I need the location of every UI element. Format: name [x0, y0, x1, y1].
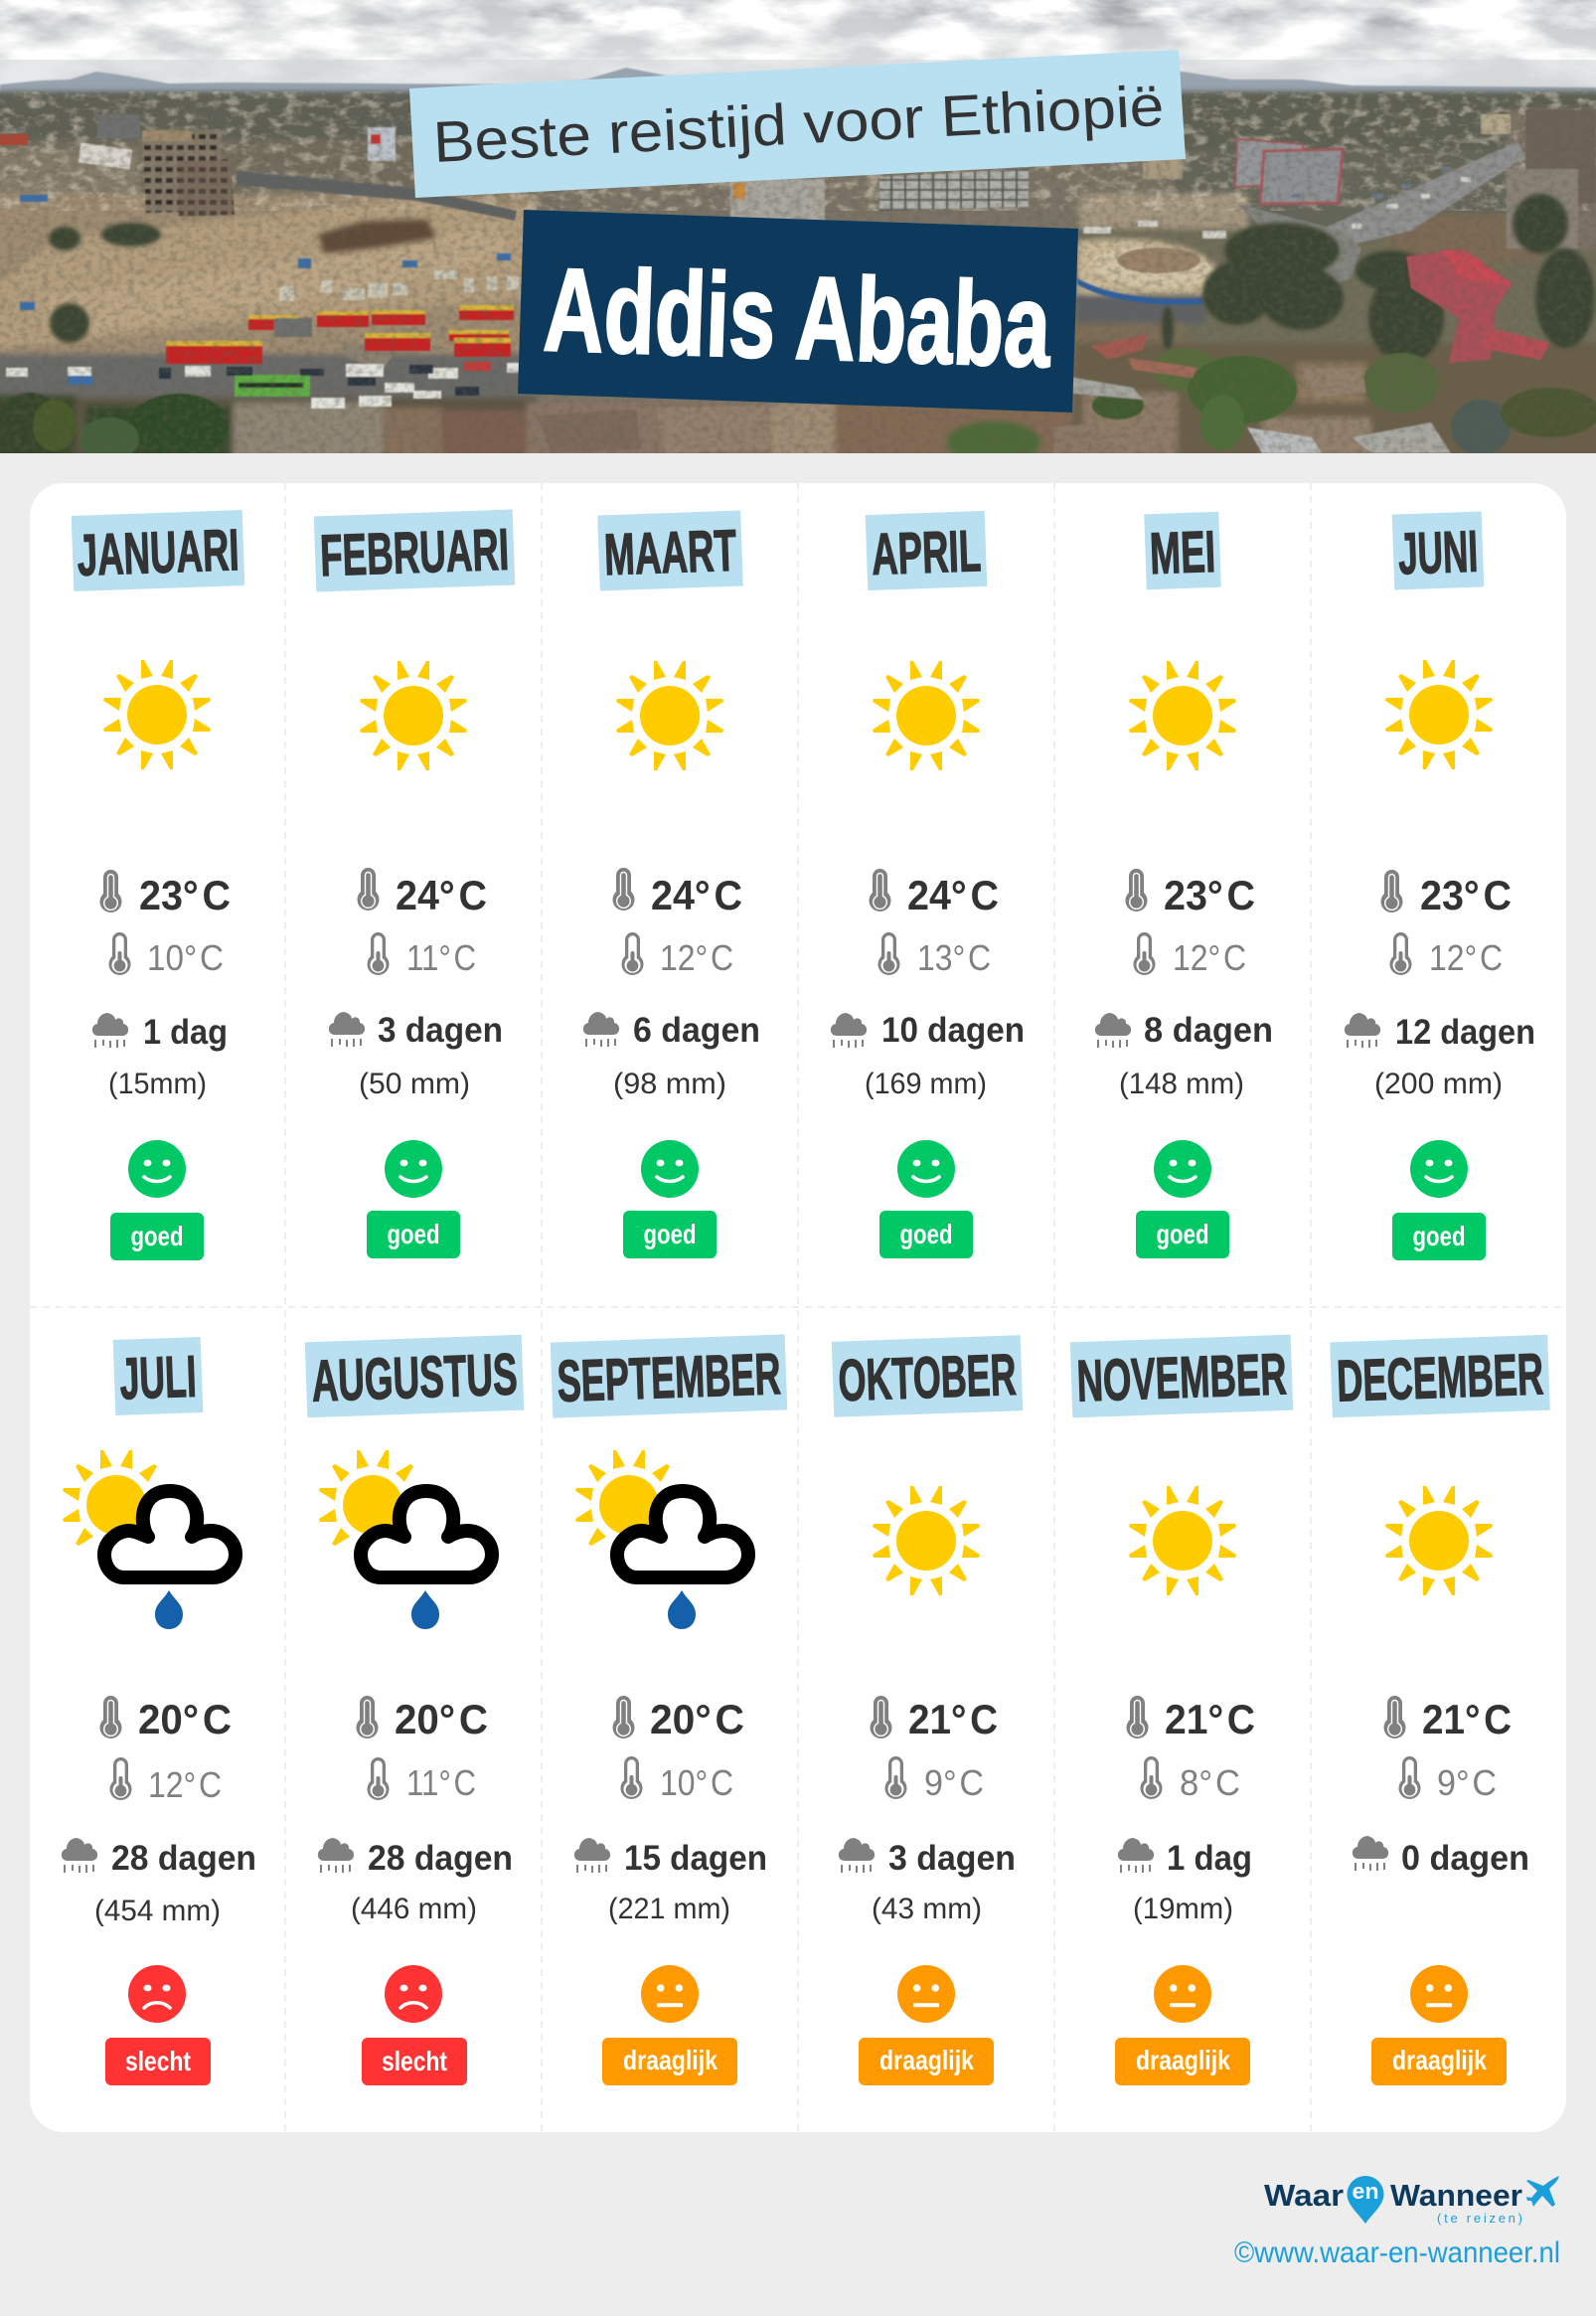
rating: goed: goed [900, 1219, 952, 1249]
rating: goed: goed [644, 1219, 696, 1249]
heading [305, 1335, 524, 1417]
month: februari [314, 510, 515, 1258]
low temperature: 10°C [660, 1762, 733, 1803]
heading [866, 511, 987, 590]
high temperature: 20°C [395, 1696, 488, 1742]
rainfall: (200 mm) [1374, 1068, 1503, 1100]
heading: APRIL [871, 518, 982, 587]
photo: aerial view of Addis Ababa [0, 0, 1596, 480]
high temperature [612, 868, 742, 918]
rainfall: (50 mm) [359, 1068, 470, 1100]
high temperature: 21°C [908, 1696, 998, 1742]
icon: map pin: en [1352, 2179, 1379, 2204]
month: oktober [832, 1335, 1023, 2085]
month: juli [62, 1337, 256, 2085]
rain days: 3 dagen [378, 1011, 503, 1050]
rainfall: (98 mm) [613, 1068, 726, 1100]
high temperature: 24°C [396, 872, 487, 918]
rating: slecht [105, 1965, 211, 2085]
low temperature [368, 932, 476, 978]
rain days: 28 dagen [111, 1839, 256, 1878]
heading: FEBRUARI [319, 517, 510, 588]
heading [113, 1337, 203, 1415]
rating: draaglijk: draaglijk [879, 2045, 974, 2075]
logo tagline: (te reizen) [1437, 2211, 1522, 2226]
website credit: ©www.waar-en-wanneer.nl [1234, 2236, 1560, 2269]
high temperature: 20°C [138, 1696, 232, 1742]
rating: goed [1136, 1140, 1229, 1258]
heading: SEPTEMBER [556, 1341, 782, 1414]
heading: JULI [118, 1344, 198, 1411]
rain days: 3 dagen [888, 1839, 1016, 1878]
rainfall: (446 mm) [351, 1893, 477, 1925]
rainfall: (148 mm) [1119, 1068, 1244, 1100]
low temperature: 12°C [660, 937, 733, 978]
rating: goed [879, 1140, 973, 1258]
month: april [831, 511, 1025, 1258]
logo word: Waar: Waar [1264, 2178, 1344, 2213]
rain days [839, 1838, 1016, 1878]
low temperature [109, 932, 224, 978]
rating: goed [110, 1140, 204, 1260]
low temperature: 12°C [148, 1764, 222, 1805]
rain days [1345, 1013, 1535, 1052]
panel: months grid [30, 483, 1566, 2132]
month: september [551, 1334, 787, 2085]
rating: draaglijk [859, 1965, 994, 2085]
high temperature [869, 869, 999, 918]
icon: sun [873, 1486, 980, 1595]
icon: sun [1385, 1486, 1493, 1595]
rating: goed: goed [388, 1219, 439, 1249]
icon: map pin [1348, 2176, 1383, 2224]
high temperature: 20°C [650, 1696, 744, 1742]
icon: sun behind rain cloud [63, 1450, 236, 1629]
low temperature [109, 1757, 222, 1805]
heading [597, 511, 743, 590]
month: januari [72, 510, 244, 1260]
rainfall: (15mm) [108, 1068, 207, 1100]
month: augustus [305, 1335, 524, 2085]
low temperature: 12°C [1173, 937, 1246, 978]
rain days: 0 dagen [1401, 1839, 1529, 1878]
high temperature [1383, 1696, 1512, 1742]
month: mei [1095, 512, 1273, 1258]
rain days: 10 dagen [881, 1011, 1025, 1050]
month: december [1330, 1335, 1550, 2085]
low temperature: 9°C [1437, 1762, 1497, 1803]
rain days: 8 dagen [1144, 1011, 1273, 1050]
rating: slecht: slecht [382, 2046, 447, 2076]
rainfall: (43 mm) [872, 1893, 982, 1925]
high temperature: 24°C [651, 872, 742, 918]
title banner [518, 210, 1078, 413]
high temperature [358, 868, 487, 918]
heading: MAART [603, 518, 737, 587]
rain days: 15 dagen [624, 1839, 767, 1878]
low temperature: 10°C [147, 937, 224, 978]
rainfall: (169 mm) [865, 1068, 987, 1100]
low temperature [368, 1757, 476, 1803]
rating: goed [1392, 1140, 1486, 1260]
rain days [1353, 1836, 1529, 1878]
low temperature: 8°C [1180, 1762, 1240, 1803]
high temperature: 21°C [1422, 1696, 1512, 1742]
low temperature: 12°C [1429, 937, 1503, 978]
title banner: Addis Ababa [542, 244, 1053, 393]
low temperature: 11°C [406, 1762, 476, 1803]
subtitle banner: Beste reistijd voor Ethiopië [431, 74, 1166, 175]
buses and cars on the road [6, 167, 1471, 409]
logo: Waar en Wanneer [1264, 2176, 1559, 2226]
rating: goed [623, 1140, 717, 1258]
rating: draaglijk [1371, 1965, 1507, 2085]
rain days: 1 dag [1167, 1839, 1252, 1878]
rating: goed: goed [131, 1221, 183, 1251]
rating: draaglijk [602, 1965, 737, 2085]
heading [1392, 511, 1484, 590]
rating: draaglijk: draaglijk [623, 2045, 718, 2075]
heading [314, 510, 515, 591]
low temperature [1389, 932, 1503, 978]
month: maart [583, 511, 760, 1258]
rating: draaglijk: draaglijk [1136, 2045, 1230, 2075]
icon: sun behind rain cloud [575, 1450, 748, 1629]
rainfall: (221 mm) [608, 1893, 730, 1925]
month: juni [1345, 511, 1535, 1260]
low temperature: 9°C [924, 1762, 984, 1803]
rain days: 1 dag [143, 1013, 228, 1052]
heading [1144, 512, 1221, 589]
month: november [1070, 1335, 1293, 2085]
rainfall: (454 mm) [94, 1895, 221, 1927]
rain days [92, 1013, 228, 1052]
logo word: Wanneer: Wanneer [1390, 2178, 1522, 2213]
high temperature: 23°C [139, 872, 231, 918]
subtitle banner [409, 50, 1186, 198]
heading: JANUARI [76, 517, 240, 588]
rating: goed [367, 1140, 460, 1258]
rain days [574, 1838, 767, 1878]
high temperature: 23°C [1164, 872, 1255, 918]
low temperature [622, 932, 733, 978]
low temperature: 13°C [917, 937, 991, 978]
icon: sun [103, 660, 211, 769]
high temperature [1127, 1696, 1255, 1742]
heading: AUGUSTUS [310, 1341, 519, 1414]
rain days [1118, 1838, 1252, 1878]
rain days: 6 dagen [633, 1011, 760, 1050]
high temperature [871, 1696, 998, 1742]
high temperature: 21°C [1165, 1696, 1255, 1742]
icon: sun [873, 661, 980, 770]
low temperature [620, 1756, 733, 1803]
high temperature [99, 870, 231, 918]
rating: goed: goed [1157, 1219, 1208, 1249]
icon: sun [1129, 1486, 1236, 1595]
rating: draaglijk [1115, 1965, 1250, 2085]
low temperature [884, 1756, 984, 1803]
icon: sun [1129, 661, 1236, 770]
heading: JUNI [1397, 519, 1479, 586]
low temperature: 11°C [406, 937, 476, 978]
heading [72, 510, 244, 591]
heading: MEI [1149, 519, 1216, 586]
high temperature [1381, 870, 1512, 918]
high temperature: 23°C [1420, 872, 1512, 918]
heading [832, 1335, 1023, 1417]
rain days: 28 dagen [368, 1839, 513, 1878]
rating: slecht [362, 1965, 467, 2085]
high temperature: 24°C [907, 872, 999, 918]
low temperature [1133, 932, 1246, 978]
heading: OKTOBER [837, 1342, 1018, 1413]
low temperature [1141, 1756, 1240, 1803]
icon: airplane [1526, 2176, 1559, 2207]
high temperature [1125, 869, 1255, 918]
rain days [329, 1011, 503, 1050]
rating: draaglijk: draaglijk [1392, 2045, 1487, 2075]
rain days: 12 dagen [1395, 1013, 1535, 1052]
icon: sun [616, 661, 723, 770]
icon: sun behind rain cloud [319, 1450, 492, 1629]
rating: slecht: slecht [125, 2046, 191, 2076]
heading [551, 1334, 787, 1418]
icon: sun [1385, 660, 1493, 769]
heading: NOVEMBER [1075, 1341, 1288, 1414]
icon: sun [360, 661, 467, 770]
rating: goed: goed [1413, 1221, 1465, 1251]
low temperature [1399, 1756, 1497, 1803]
rainfall: (19mm) [1133, 1893, 1233, 1925]
low temperature [878, 932, 991, 978]
heading [1070, 1335, 1293, 1417]
